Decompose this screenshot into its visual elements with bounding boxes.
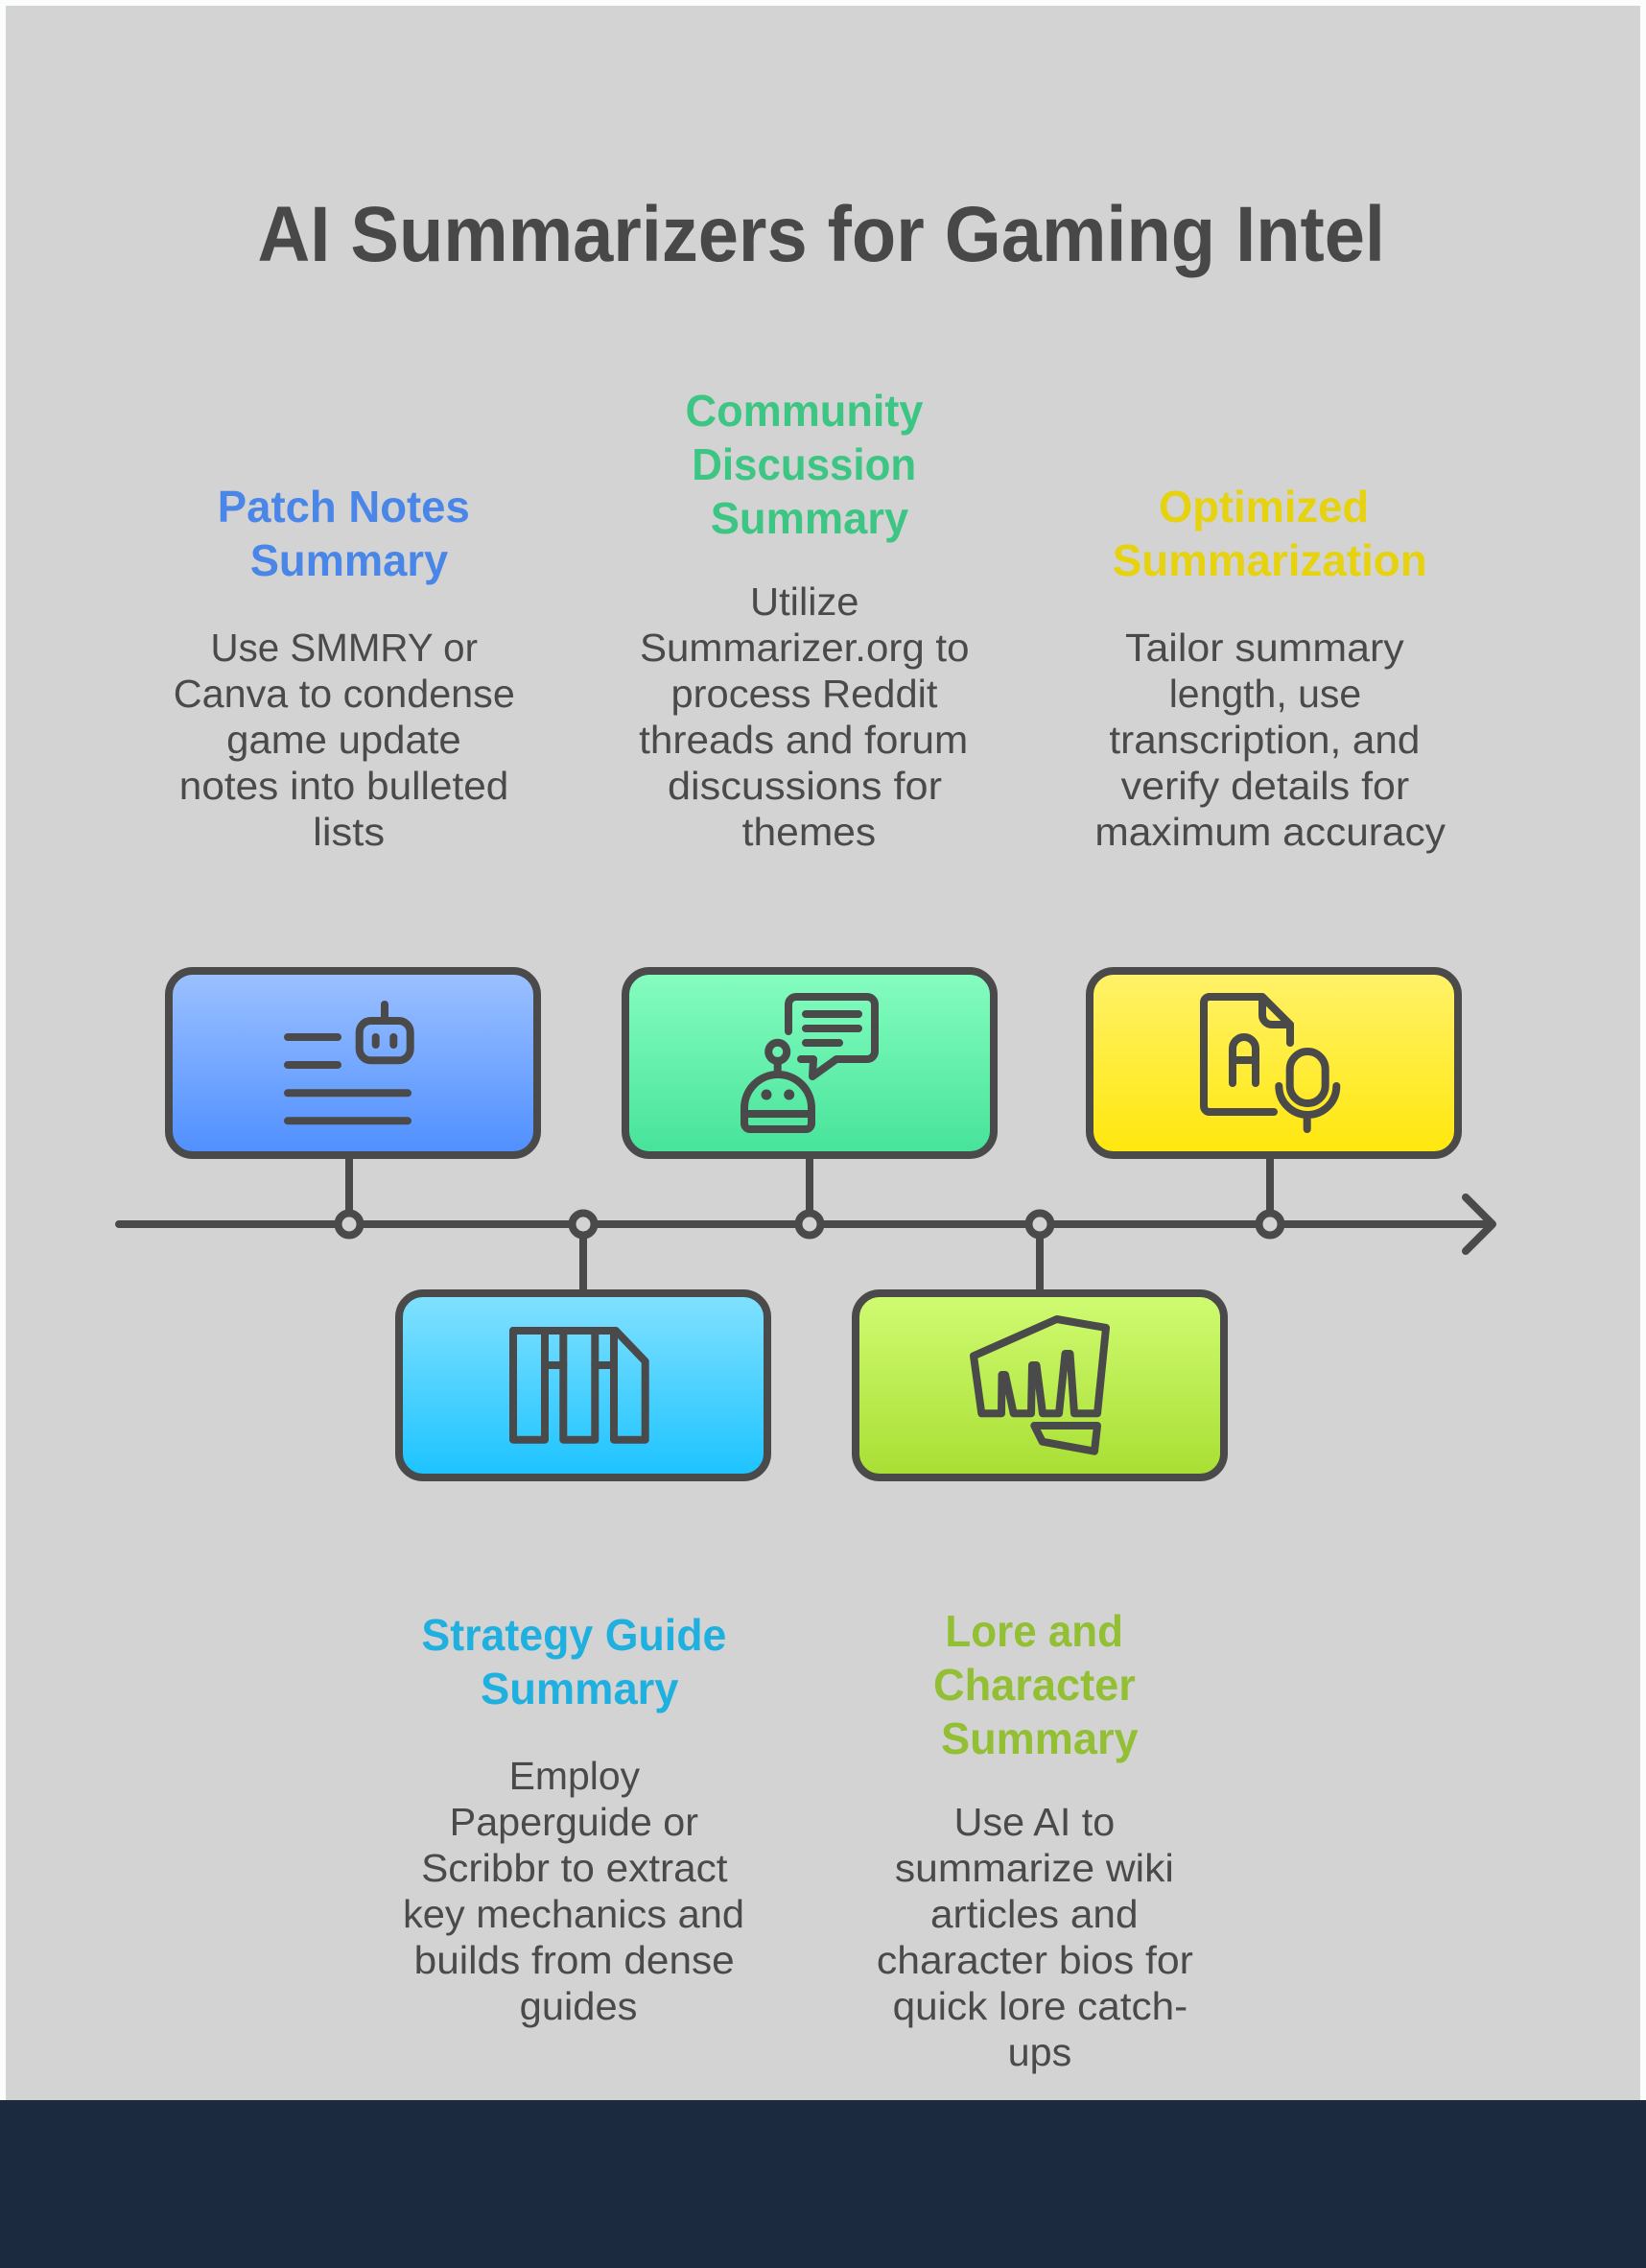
title: AI Summarizers for Gaming Intel [257, 191, 1385, 278]
description: lore and character summary [877, 1800, 1193, 2074]
description: community discussion summary [639, 579, 969, 854]
icon: document with letter A and microphone [1204, 997, 1336, 1129]
heading: strategy guide summary [421, 1610, 726, 1713]
heading: patch notes summary: Summary [250, 535, 449, 585]
description: patch notes summary: Use SMMRY or [211, 626, 478, 670]
heading: patch notes summary: Patch Notes [218, 482, 470, 532]
description: community discussion summary: process Reddit [671, 672, 938, 716]
card: community discussion [625, 971, 994, 1155]
description: optimized summarization [1094, 626, 1446, 854]
panel: patch notes summary text [174, 482, 515, 854]
heading: lore and character summary: Summary [941, 1713, 1139, 1763]
card: patch notes [169, 971, 537, 1155]
description: optimized summarization: maximum accuracy [1094, 810, 1446, 854]
card: lore and character [856, 1293, 1224, 1477]
description: patch notes summary: Canva to condense [174, 672, 515, 716]
heading: strategy guide summary: Summary [481, 1664, 679, 1713]
panel: optimized summarization text [1094, 482, 1446, 854]
description: lore and character summary: quick lore catch- [893, 1984, 1187, 2028]
icon: robot with chat bubble [744, 997, 875, 1129]
heading: lore and character summary [933, 1606, 1139, 1763]
timeline arrow with nodes [119, 1155, 1493, 1293]
card: optimized summarization [1090, 971, 1458, 1155]
heading: community discussion summary: Summary [711, 493, 909, 543]
description: optimized summarization: Tailor summary [1125, 626, 1404, 670]
description: patch notes summary: game update [226, 718, 461, 762]
heading: optimized summarization [1113, 482, 1427, 585]
icon: fist [974, 1319, 1106, 1452]
heading: optimized summarization: Optimized [1159, 482, 1369, 532]
description: community discussion summary: Utilize [750, 579, 859, 624]
heading: community discussion summary: Discussion [692, 439, 916, 489]
description: strategy guide summary: guides [520, 1984, 637, 2028]
description: lore and character summary: summarize wiki [895, 1846, 1174, 1890]
timeline nodes [338, 1213, 1282, 1236]
description: patch notes summary [174, 626, 515, 854]
panel: lore and character summary text [877, 1606, 1193, 2074]
description: lore and character summary: ups [1008, 2030, 1071, 2074]
card: strategy guide [399, 1293, 767, 1477]
description: lore and character summary: Use AI to [954, 1800, 1115, 1844]
heading: strategy guide summary: Strategy Guide [421, 1610, 726, 1660]
description: strategy guide summary: key mechanics and [403, 1892, 744, 1936]
arrow line [119, 1197, 1493, 1251]
description: strategy guide summary: Employ [509, 1754, 641, 1798]
description: community discussion summary: Summarizer.org to [640, 626, 969, 670]
heading: community discussion summary: Community [685, 386, 924, 436]
description: patch notes summary: lists [313, 810, 385, 854]
description: optimized summarization: length, use [1169, 672, 1361, 716]
description: community discussion summary: themes [742, 810, 876, 854]
description: optimized summarization: transcription, and [1109, 718, 1420, 762]
description: strategy guide summary: Paperguide or [450, 1800, 698, 1844]
heading: optimized summarization: Summarization [1113, 535, 1427, 585]
connectors [349, 1155, 1270, 1293]
panel: community discussion summary text [639, 386, 969, 854]
icon: books [513, 1331, 646, 1440]
footer bar [0, 2100, 1646, 2268]
panel: strategy guide summary text [403, 1610, 744, 2028]
description: community discussion summary: discussions for [668, 764, 942, 808]
heading: lore and character summary: Character [933, 1660, 1136, 1710]
description: lore and character summary: articles and [930, 1892, 1138, 1936]
description: strategy guide summary [403, 1754, 744, 2028]
heading: patch notes summary [218, 482, 470, 585]
description: strategy guide summary: builds from dense [414, 1938, 735, 1982]
heading: community discussion summary [685, 386, 924, 543]
description: lore and character summary: character bios for [877, 1938, 1193, 1982]
icon: document lines with robot head [288, 1004, 411, 1121]
description: optimized summarization: verify details for [1121, 764, 1409, 808]
description: strategy guide summary: Scribbr to extract [421, 1846, 728, 1890]
description: community discussion summary: threads and forum [639, 718, 968, 762]
description: patch notes summary: notes into bulleted [179, 764, 508, 808]
heading: lore and character summary: Lore and [945, 1606, 1123, 1656]
